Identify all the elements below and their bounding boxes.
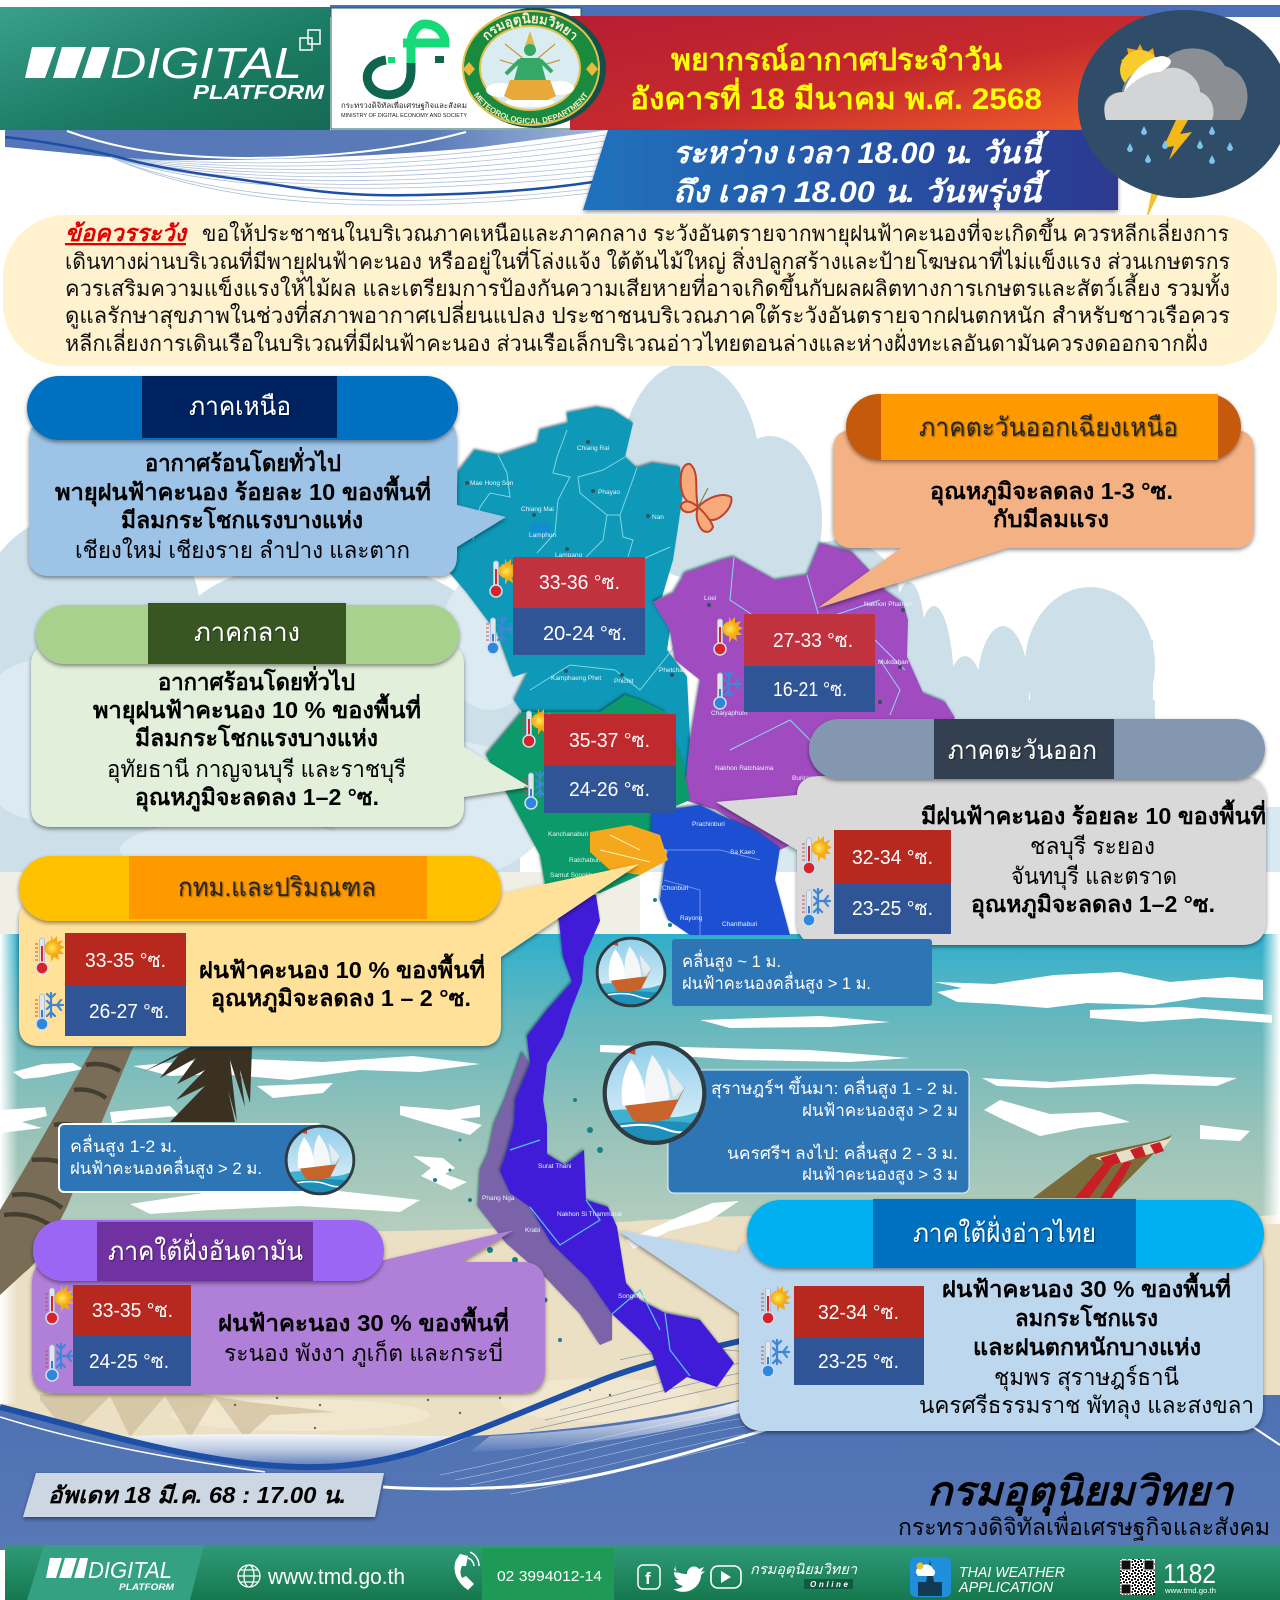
gulf text: ชุมพร สุราษฎร์ธานี [994,1364,1179,1391]
title banner red [570,16,1150,130]
panel: southern gulf coast [617,1199,1264,1431]
panel: southern andaman coast [32,1220,545,1393]
map: southern andaman region: Phang Nga [482,1195,515,1202]
warning body text [65,218,1230,356]
east text: มีฝนฟ้าคะนอง ร้อยละ 10 ของพื้นที่ [921,799,1266,829]
map: northern region: Mae Hong Son [470,480,514,487]
footer social icons: กรมอุตุนิยมวิทยา [750,1561,858,1578]
department name: กรมอุตุนิยมวิทยา [927,1470,1235,1517]
wave box: andaman: ฝนฟ้าคะนองคลื่นสูง > 2 ม. [70,1156,262,1179]
map: islands [433,898,672,1342]
central text: พายุฝนฟ้าคะนอง 10 % ของพื้นที่ [93,693,421,725]
central body with pointer [31,645,530,827]
footer QR and hotline: 1182 [1163,1558,1216,1589]
map: northern region: Phayao [598,489,620,496]
meteorological department seal: กรมอุตุนิยมวิทยา [484,12,576,40]
central text [93,665,421,812]
gulf text: และฝนตกหนักบางแห่ง [973,1334,1201,1360]
gulf icons and temperature [761,1285,924,1385]
footer weather app: THAI WEATHER [959,1564,1065,1581]
gulf text: ลมกระโชกแรง [1015,1304,1158,1331]
bangkok icons and temperature: 33-35 °ซ. [85,950,166,972]
warning body text: หลีกเลี่ยงการเดินเรือในบริเวณที่มีฝนฟ้าคะนอง ส่วนเรือเล็กบริเวณอ่าวไทยตอนล่างและห่างฝั่งทะเลอันดามันควรงดออกจากฝั่ง [65,328,1208,356]
map: eastern region [650,805,790,935]
map: northern region: Phetchabun [659,667,694,674]
map: southern gulf region [500,895,734,1393]
bangkok heading [19,856,501,921]
map: eastern region: Chonburi [662,885,688,892]
east heading [809,719,1265,779]
map: southern gulf region: Nakhon Si Thammarat [557,1211,622,1218]
top header band: digital platform logo: DIGITAL [110,39,302,88]
top header band: digital platform logo [0,7,330,130]
footer website: www.tmd.go.th [267,1564,405,1589]
panel: Bangkok and vicinity: กทม.และปริมณฑล [178,872,376,902]
map: southern gulf region: Songkhla [618,1293,645,1300]
map: central region: Kanchanaburi [548,831,588,838]
meteorological department seal [462,8,606,128]
east text: อุณหภูมิจะลดลง 1–2 °ซ. [971,891,1215,919]
map: eastern region: Rayong [680,915,703,922]
foam [0,972,1272,1249]
gulf text: นครศรีธรรมราช พัทลุง และสงขลา [919,1392,1254,1419]
wave box: upper gulf [595,936,932,1008]
panel: southern andaman coast: ภาคใต้ฝั่งอันดามัน [108,1233,303,1266]
central text: มีลมกระโชกแรงบางแห่ง [135,724,378,751]
map: northern region: Nan [652,514,664,521]
bangkok text: ฝนฟ้าคะนอง 10 % ของพื้นที่ [199,953,485,983]
gulf icons and temperature: 23-25 °ซ. [818,1351,899,1373]
map: central region: Samut Songkhram [550,872,604,879]
wave box: lower gulf: นครศรีฯ ลงไป: คลื่นสูง 2 - 3 ม. [727,1141,958,1164]
map: northern region: Kamphaeng Phet [551,675,601,682]
footer weather app: APPLICATION [958,1579,1053,1596]
wave box: lower gulf: ฝนฟ้าคะนองสูง > 3 ม [802,1165,958,1185]
panel: eastern region [716,719,1266,945]
north text: พายุฝนฟ้าคะนอง ร้อยละ 10 ของพื้นที่ [55,475,431,507]
andaman body with pointer [32,1230,545,1393]
icon: weather storm circle [1078,10,1280,220]
sand pebbles [59,1329,611,1429]
beach chair [1033,1135,1172,1198]
map of Thailand [433,407,955,1393]
footer logo: DIGITAL [88,1557,172,1583]
andaman text: ระนอง พังงา ภูเก็ต และกระบี่ [224,1337,503,1367]
icon: butterfly [681,464,731,532]
panel: Bangkok and vicinity [19,856,639,1046]
bangkok icons and temperature [35,933,186,1036]
map: northern region: Phichit [614,678,634,685]
east icons and temperature: 32-34 °ซ. [852,847,933,869]
panel: central region [31,603,530,827]
temperature box: north: 33-36 °ซ. [539,572,620,594]
east icons and temperature: 23-25 °ซ. [852,898,933,920]
footer social icons: f [645,1569,651,1588]
map: north-eastern region: Nakhon Ratchasima [715,765,774,772]
north text: มีลมกระโชกแรงบางแห่ง [121,506,363,533]
department name [898,1470,1270,1541]
sand [0,1215,1280,1445]
temperature box: north-east [713,614,875,712]
central text: อากาศร้อนโดยทั่วไป [158,665,355,695]
map: eastern region: Sa Kaeo [730,849,755,856]
department name: กระทรวงดิจิทัลเพื่อเศรษฐกิจและสังคม [898,1511,1270,1541]
footer bar [5,1545,1280,1600]
east text: ชลบุรี ระยอง [1030,833,1155,860]
map: north-eastern region: Mukdahan [878,659,909,666]
gulf icons and temperature: 32-34 °ซ. [818,1302,899,1324]
warning panel [3,215,1277,366]
map: northern region [450,407,694,800]
temperature box: central: 35-37 °ซ. [569,730,650,752]
update time tag [23,1473,384,1517]
top swoosh [5,130,609,205]
wave box: upper gulf: ฝนฟ้าคะนองคลื่นสูง > 1 ม. [682,971,871,994]
map: Bangkok and vicinity [590,825,668,875]
map: eastern region: Chanthaburi [722,921,757,928]
temperature box: central [522,708,676,813]
footer social icons [638,1561,858,1592]
footer QR and hotline: www.tmd.go.th [1164,1588,1216,1595]
east icons and temperature [802,830,951,934]
ministry logo block [331,8,581,129]
warning body text: ควรเสริมความแข็งแรงให้ไม้ผล และเตรียมการป้องกันความเสียหายที่อาจเกิดขึ้นกับผลผลิตทางการเกษตรและสัตว์เลี้ยง รวมทั้ง [65,273,1230,301]
wave box: upper gulf: คลื่นสูง ~ 1 ม. [682,949,781,972]
andaman text [218,1306,509,1367]
footer social icons: Online [810,1580,849,1589]
clouds [0,362,1155,872]
north heading [27,376,458,440]
meteorological department seal: METEOROLOGICAL DEPARTMENT [474,92,588,124]
andaman icons and temperature: 33-35 °ซ. [92,1300,173,1322]
temperature box: north: 20-24 °ซ. [543,623,627,645]
east text [921,799,1266,919]
andaman heading [33,1220,384,1281]
sand hatch [530,1349,745,1430]
temperature box: north-east: 27-33 °ซ. [773,630,853,652]
panel: northern region: ภาคเหนือ [189,391,291,421]
map: northern region: Chiang Rai [577,445,609,452]
map: north-eastern region: Buriram [792,775,815,782]
footer logo [27,1545,204,1600]
east text: จันทบุรี และตราด [1011,863,1177,890]
gulf text [919,1272,1254,1419]
footer phone [454,1548,614,1600]
footer logo: PLATFORM [119,1582,175,1592]
ministry logo block: MINISTRY OF DIGITAL ECONOMY AND SOCIETY [341,113,467,119]
sand shadows [40,1394,335,1438]
central heading [36,603,459,664]
forecast period banner [583,130,1118,211]
wave box: andaman [59,1124,356,1196]
ministry logo block: กระทรวงดิจิทัลเพื่อเศรษฐกิจและสังคม [341,100,467,110]
wave box: lower gulf: ฝนฟ้าคะนองสูง > 2 ม [802,1101,958,1121]
footer weather app [910,1557,1065,1597]
northeast text [930,478,1173,532]
north text: เชียงใหม่ เชียงราย ลำปาง และตาก [75,537,410,563]
warning body text: ขอให้ประชาชนในบริเวณภาคเหนือและภาคกลาง ระวังอันตรายจากพายุฝนฟ้าคะนองที่จะเกิดขึ้น ควรหลีกเลี่ยงการ [202,218,1229,247]
north body with pointer [29,420,506,576]
map: north-eastern region: Nakhon Phanom [864,601,912,608]
panel: north-eastern region [818,394,1254,608]
warning body text: ดูแลรักษาสุขภาพในช่วงที่สภาพอากาศเปลี่ยนแปลง ประชาชนบริเวณภาคใต้ระวังอันตรายจากฝนตกหนัก สำหรับชาวเรือควร [65,300,1230,329]
footer phone: 02 3994012-14 [497,1568,602,1585]
gulf heading [747,1199,1264,1268]
northeast heading [846,394,1241,460]
temperature box: central: 24-26 °ซ. [569,779,650,801]
panel: central region: ภาคกลาง [194,617,300,647]
andaman text: ฝนฟ้าคะนอง 30 % ของพื้นที่ [218,1306,509,1336]
top header band: digital platform logo: PLATFORM [193,82,326,104]
central text: อุทัยธานี กาญจนบุรี และราชบุรี [107,756,406,783]
temperature box: north-east: 16-21 °ซ. [773,679,847,701]
sea [0,934,1280,1254]
bangkok body with pointer [19,864,639,1046]
map: northern region: Lamphun [529,532,556,539]
sea edge fades [0,934,18,1404]
map: central region: Ratchaburi [569,857,600,864]
wave box: lower gulf [602,1040,969,1193]
forecast period banner: ถึง เวลา 18.00 น. วันพรุ่งนี้ [673,169,1051,211]
temperature box: north [486,557,645,655]
bangkok text [199,953,485,1013]
bangkok text: อุณหภูมิจะลดลง 1 – 2 °ซ. [211,985,471,1013]
wave box: andaman: คลื่นสูง 1-2 ม. [70,1134,177,1157]
map: north-eastern region: Chaiyaphum [711,710,748,717]
map: southern andaman region: Krabi [525,1227,540,1234]
andaman icons and temperature: 24-25 °ซ. [89,1351,169,1373]
title banner red: พยากรณ์อากาศประจำวัน [671,43,1002,77]
warning heading: ข้อควรระวัง [65,220,188,246]
panel: north-eastern region: ภาคตะวันออกเฉียงเหนือ [919,412,1178,442]
northeast text: กับมีลมแรง [993,506,1109,532]
central text: อุณหภูมิจะลดลง 1–2 °ซ. [135,784,379,812]
gulf body with pointer [617,1230,1263,1431]
andaman icons and temperature [45,1285,191,1386]
forecast period banner: ระหว่าง เวลา 18.00 น. วันนี้ [673,130,1050,170]
panel: eastern region: ภาคตะวันออก [948,735,1097,765]
north text: อากาศร้อนโดยทั่วไป [145,446,341,476]
title banner red: อังคารที่ 18 มีนาคม พ.ศ. 2568 [630,77,1042,116]
bangkok icons and temperature: 26-27 °ซ. [89,1001,169,1023]
map: north-eastern region: Loei [704,595,716,602]
bottom blue wave [0,1395,1280,1550]
map: northern region: Lampang [555,552,582,559]
panel: northern region [27,376,506,576]
footer QR and hotline [1120,1558,1216,1595]
east body with pointer [716,776,1266,945]
wave box: lower gulf: สุราษฎร์ฯ ขึ้นมา: คลื่นสูง 1 - 2 ม. [711,1076,958,1099]
north text [55,446,431,563]
warning body text: เดินทางผ่านบริเวณที่มีพายุฝนฟ้าคะนอง หรืออยู่ในที่โล่งแจ้ง ใต้ต้นไม้ใหญ่ สิ่งปลูกสร้างและป้ายโฆษณาที่ไม่แข็งแรง ส่วนเกษตรกร [65,246,1230,275]
northeast body with pointer [818,430,1254,608]
panel: southern gulf coast: ภาคใต้ฝั่งอ่าวไทย [913,1215,1096,1248]
update time tag: อัพเดท 18 มี.ค. 68 : 17.00 น. [48,1482,346,1508]
map: southern andaman region [478,1052,612,1345]
map: north-eastern region [653,543,955,850]
palm tree [0,1047,252,1295]
map: southern gulf region: Surat Thani [538,1163,571,1170]
gulf text: ฝนฟ้าคะนอง 30 % ของพื้นที่ [942,1272,1231,1302]
northeast text: อุณหภูมิจะลดลง 1-3 °ซ. [930,478,1173,506]
map: northern region: Chiang Mai [521,506,554,513]
map: eastern region: Prachinburi [692,821,725,828]
map: central region [486,695,690,895]
